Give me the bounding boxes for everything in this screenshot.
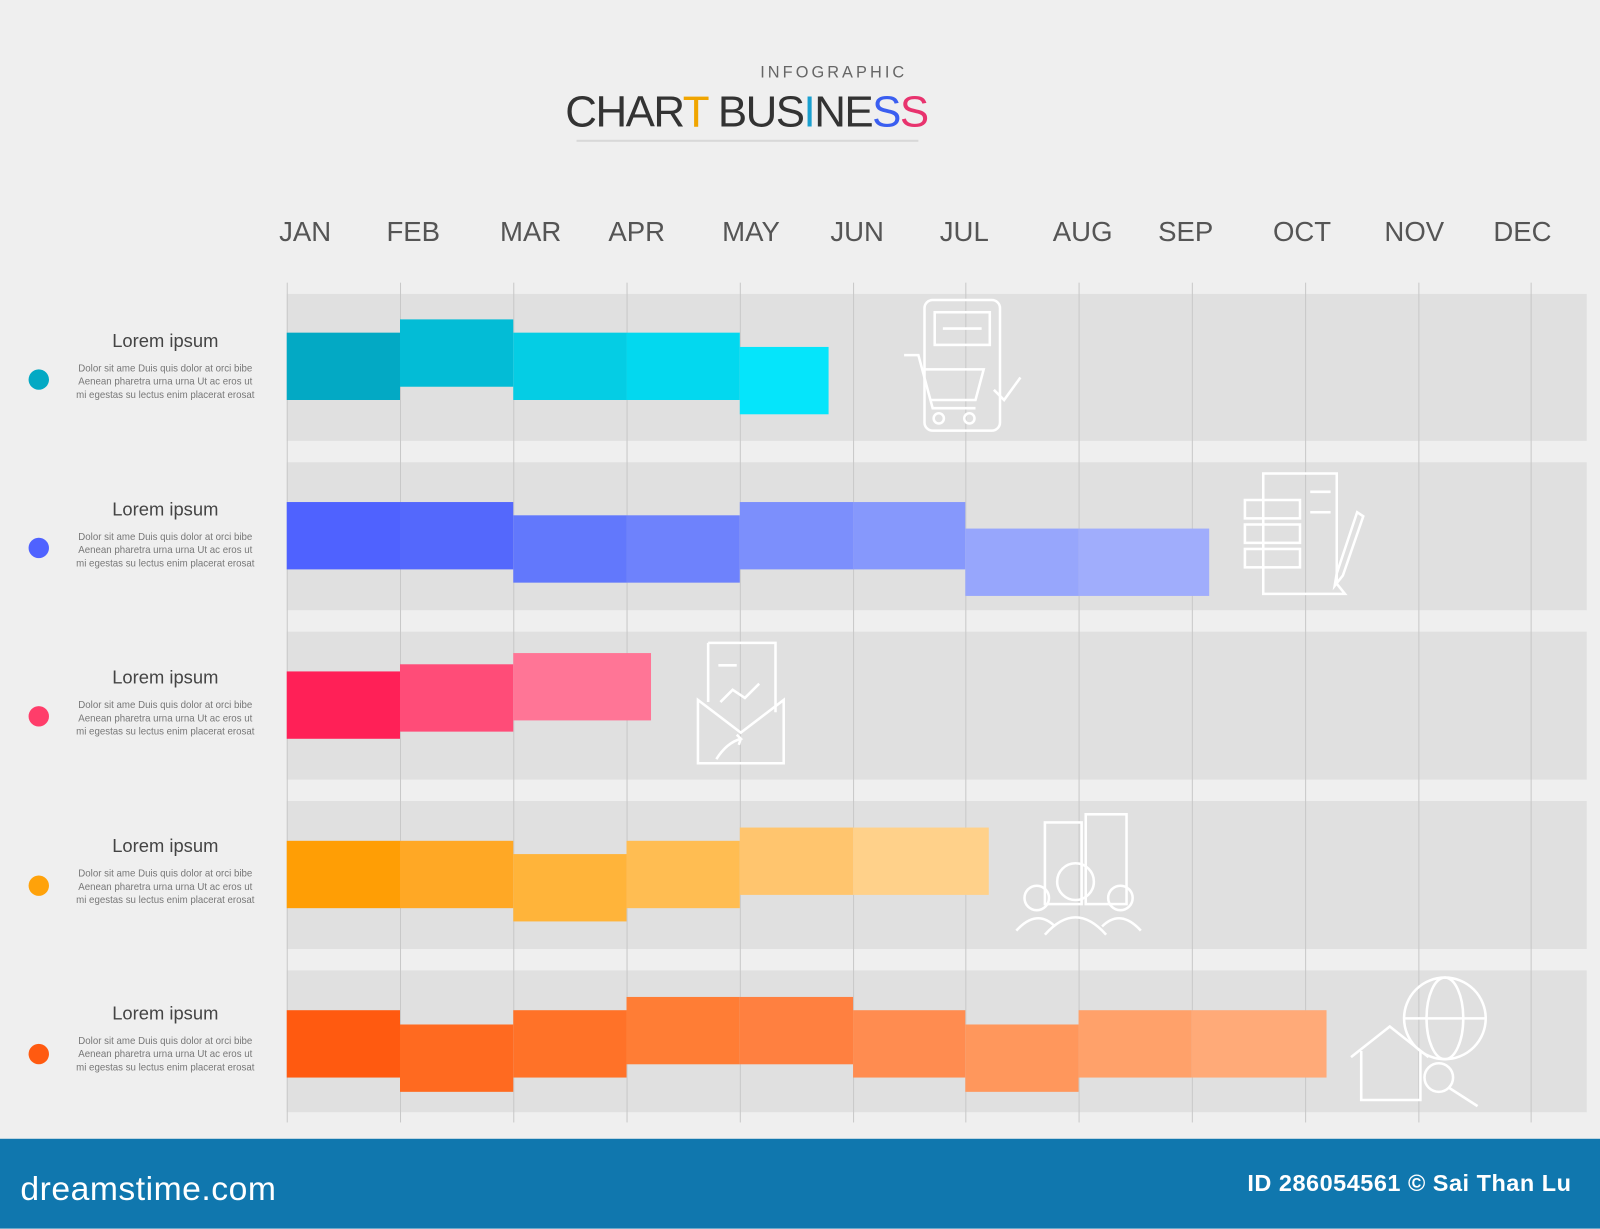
row labels: Lorem ipsum xyxy=(112,667,218,688)
month labels: OCT xyxy=(1273,216,1331,247)
row labels: Dolor sit ame Duis quis dolor at orci bibe xyxy=(78,363,252,374)
row labels: mi egestas su lectus enim placerat erosat xyxy=(76,558,254,569)
month labels: JUN xyxy=(830,216,884,247)
row labels: mi egestas su lectus enim placerat erosat xyxy=(76,895,254,906)
row labels: Aenean pharetra urna urna Ut ac eros ut xyxy=(78,713,252,724)
icon: phone cart xyxy=(904,298,1022,432)
icon: mail report xyxy=(696,642,785,764)
month labels: FEB xyxy=(386,216,440,247)
row labels: Lorem ipsum xyxy=(112,836,218,856)
row labels xyxy=(28,331,254,1073)
bars row 1 xyxy=(286,319,829,414)
footer logo: dreamstime.com xyxy=(20,1169,276,1207)
bars row 2 xyxy=(286,502,1210,596)
footer xyxy=(0,1139,1600,1229)
bars row 3 xyxy=(286,653,651,739)
row labels: Dolor sit ame Duis quis dolor at orci bibe xyxy=(78,532,252,543)
month labels: MAR xyxy=(500,216,561,247)
row labels: Lorem ipsum xyxy=(112,331,218,351)
bars row 4 xyxy=(286,828,989,922)
month labels: APR xyxy=(608,216,665,247)
month labels xyxy=(279,216,1552,247)
title xyxy=(565,64,928,142)
row labels: mi egestas su lectus enim placerat erosat xyxy=(76,727,254,738)
row labels: Dolor sit ame Duis quis dolor at orci bibe xyxy=(78,700,252,711)
month labels: SEP xyxy=(1158,216,1213,247)
row labels: Aenean pharetra urna urna Ut ac eros ut xyxy=(78,882,252,893)
month labels: NOV xyxy=(1384,216,1444,247)
row labels: Dolor sit ame Duis quis dolor at orci bibe xyxy=(78,1036,252,1047)
month labels: JAN xyxy=(279,216,331,247)
main title: CHART BUSINESS xyxy=(565,88,928,137)
month labels: JUL xyxy=(940,216,989,247)
icon: city people xyxy=(1016,813,1142,936)
icon: house globe xyxy=(1350,976,1487,1107)
footer credit: ID 286054561 © Sai Than Lu xyxy=(1247,1169,1571,1196)
icon: server document xyxy=(1244,472,1365,596)
month labels: DEC xyxy=(1493,216,1552,247)
month labels: MAY xyxy=(722,216,780,247)
row labels: Lorem ipsum xyxy=(112,499,218,519)
row labels: Aenean pharetra urna urna Ut ac eros ut xyxy=(78,545,252,556)
row labels: Dolor sit ame Duis quis dolor at orci bibe xyxy=(78,868,252,880)
row labels: mi egestas su lectus enim placerat erosat xyxy=(76,390,254,401)
row labels: mi egestas su lectus enim placerat erosat xyxy=(76,1062,254,1073)
subtitle: INFOGRAPHIC xyxy=(760,64,907,82)
row labels: Aenean pharetra urna urna Ut ac eros ut xyxy=(78,1049,252,1060)
month labels: AUG xyxy=(1053,216,1113,247)
row labels: Lorem ipsum xyxy=(112,1003,218,1023)
row labels: Aenean pharetra urna urna Ut ac eros ut xyxy=(78,377,252,388)
bars row 5 xyxy=(286,996,1326,1092)
